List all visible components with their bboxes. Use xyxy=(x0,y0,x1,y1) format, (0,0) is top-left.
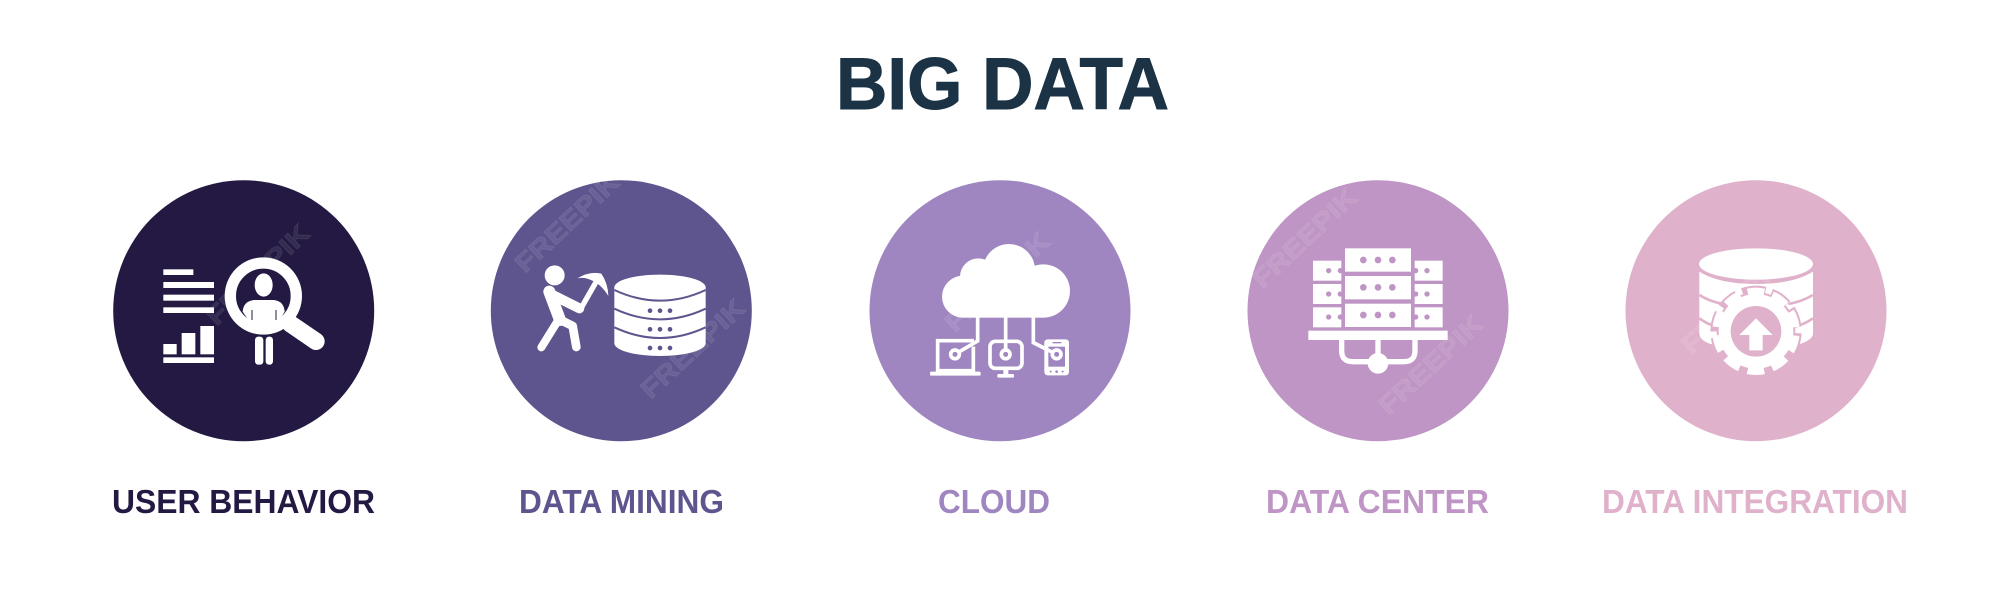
circle: data center xyxy=(1248,180,1508,441)
title: BIG DATA xyxy=(836,44,1169,125)
panel: user behavior xyxy=(113,180,374,441)
icon: server racks xyxy=(1246,182,1489,420)
label: cloud: CLOUD xyxy=(938,483,1050,520)
icon: miner and database xyxy=(509,166,751,404)
circle: data mining xyxy=(491,180,752,441)
label: data center: DATA CENTER xyxy=(1266,483,1489,520)
icon: miner and database: FREEPIK xyxy=(509,166,626,278)
circle: data integration xyxy=(1626,180,1886,441)
panel: data mining xyxy=(491,166,752,441)
panel: data center xyxy=(1246,180,1508,441)
icon: cloud and devices: FREEPIK xyxy=(939,226,1056,338)
label: data integration: DATA INTEGRATION xyxy=(1602,483,1908,520)
panel: data integration xyxy=(1626,180,1886,441)
panel: cloud xyxy=(870,180,1130,441)
icon: user analysis xyxy=(163,218,316,365)
icon: user analysis: FREEPIK xyxy=(200,218,316,331)
icon: server racks: FREEPIK xyxy=(1372,308,1489,420)
icon: server racks: FREEPIK xyxy=(1246,182,1363,294)
label: data mining: DATA MINING xyxy=(519,483,724,520)
circle: user behavior xyxy=(113,180,374,441)
icon: database with gear: FREEPIK xyxy=(1675,248,1792,360)
icon: database with gear xyxy=(1675,248,1813,380)
label: user behavior: USER BEHAVIOR xyxy=(112,483,375,520)
circle: cloud xyxy=(870,180,1130,441)
icon: cloud and devices xyxy=(930,226,1070,378)
icon: miner and database: FREEPIK xyxy=(634,292,751,404)
